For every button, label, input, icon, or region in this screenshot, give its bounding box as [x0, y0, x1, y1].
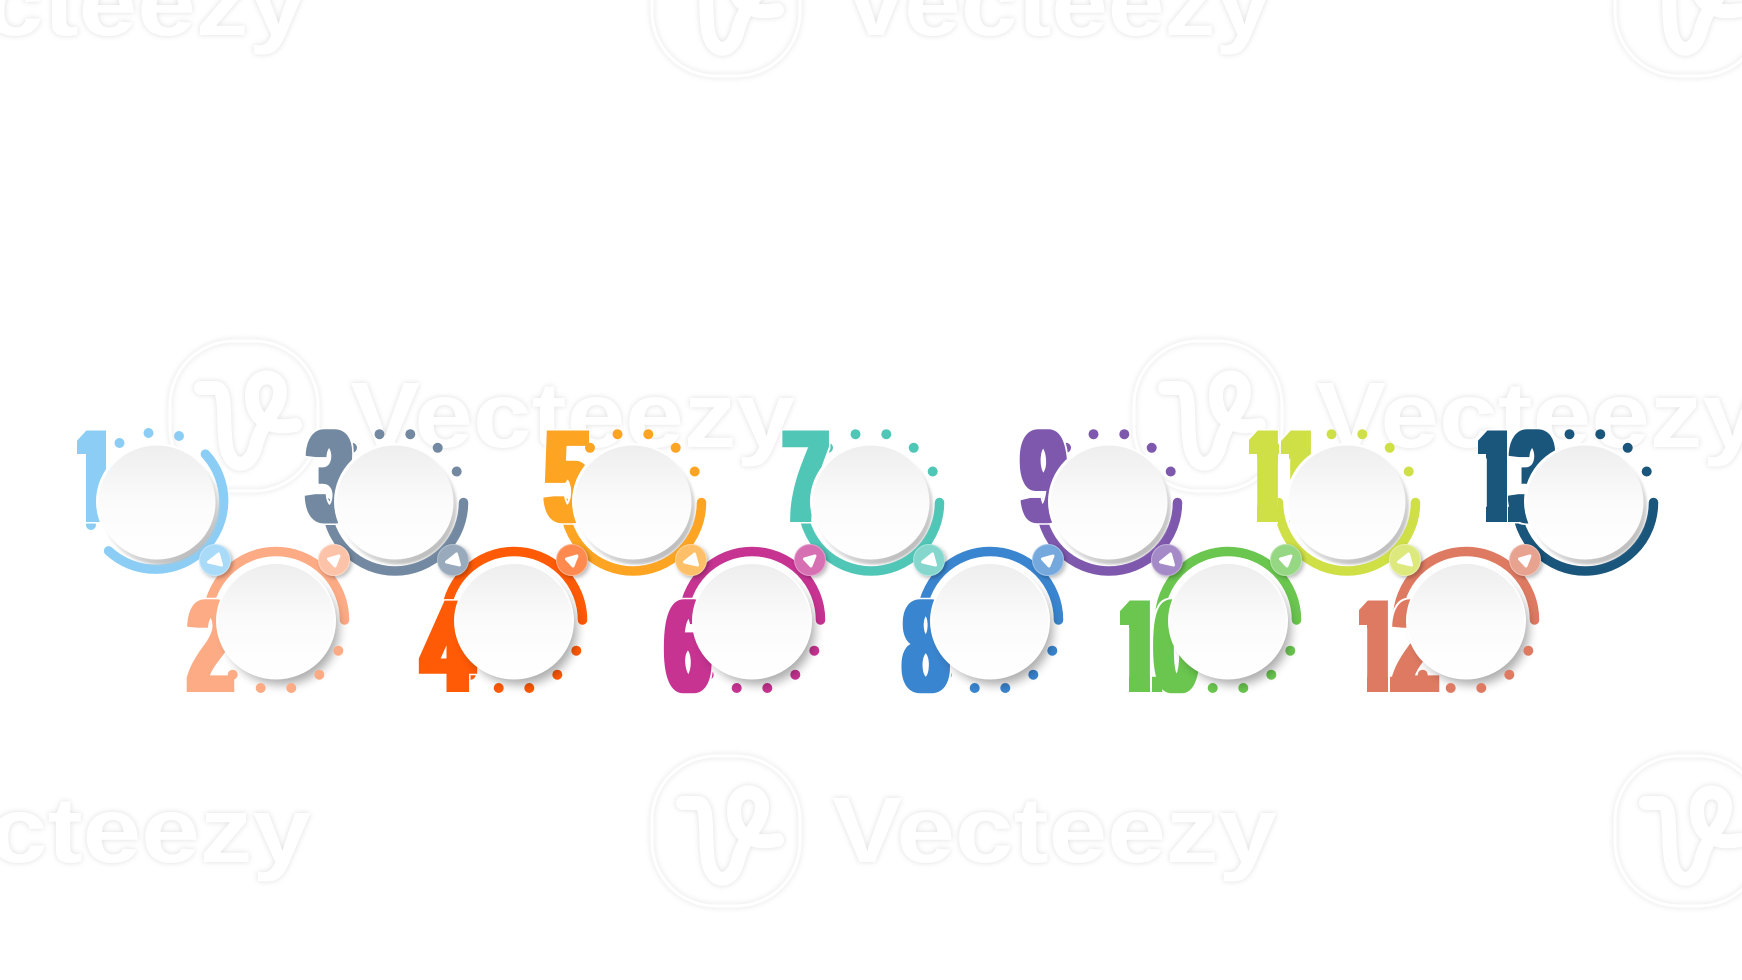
step 7: [784, 403, 940, 571]
step 6: 6: [666, 573, 709, 719]
step 11: 11: [1244, 403, 1320, 549]
badge 6: [794, 544, 826, 576]
badge 12: [1510, 544, 1540, 576]
step 4: [423, 552, 582, 719]
badge 4: [556, 544, 588, 576]
connector badges with arrows: [200, 544, 1540, 576]
step 6: [666, 552, 820, 719]
step 8: [904, 552, 1058, 719]
step 12: 12: [1354, 573, 1437, 719]
badge 1: [200, 544, 230, 576]
step 5: 5: [546, 403, 589, 549]
badge 2: [318, 544, 350, 576]
step 3: 3: [308, 403, 351, 549]
step 1: 1: [73, 403, 116, 549]
step 5: [546, 403, 702, 571]
step 10: [1120, 546, 1302, 694]
watermarks: Vecteezy: [832, 778, 1277, 882]
step 11: [1249, 429, 1420, 576]
step 9: 9: [1022, 403, 1065, 549]
step 10: 10: [1116, 573, 1198, 719]
step 12: [1359, 546, 1540, 693]
badge 9: [1152, 544, 1182, 576]
step 7: 7: [784, 403, 827, 549]
step 9: [1022, 403, 1178, 571]
step 13: 13: [1474, 403, 1554, 549]
badge 10: [1270, 544, 1302, 576]
watermarks: Vecteezy: [350, 363, 795, 467]
watermarks: Vecteezy: [1316, 363, 1742, 467]
step 2: [189, 552, 344, 719]
step 13: [1478, 428, 1658, 576]
badge 3: [438, 544, 468, 576]
step 8: 8: [904, 573, 947, 719]
step 3: [308, 403, 464, 571]
step 1: [77, 428, 228, 574]
badge 7: [914, 544, 944, 576]
step 2: 2: [189, 573, 232, 719]
step 4: 4: [423, 573, 472, 719]
badge 11: [1390, 544, 1420, 576]
badge 8: [1032, 544, 1064, 576]
badge 5: [676, 544, 706, 576]
